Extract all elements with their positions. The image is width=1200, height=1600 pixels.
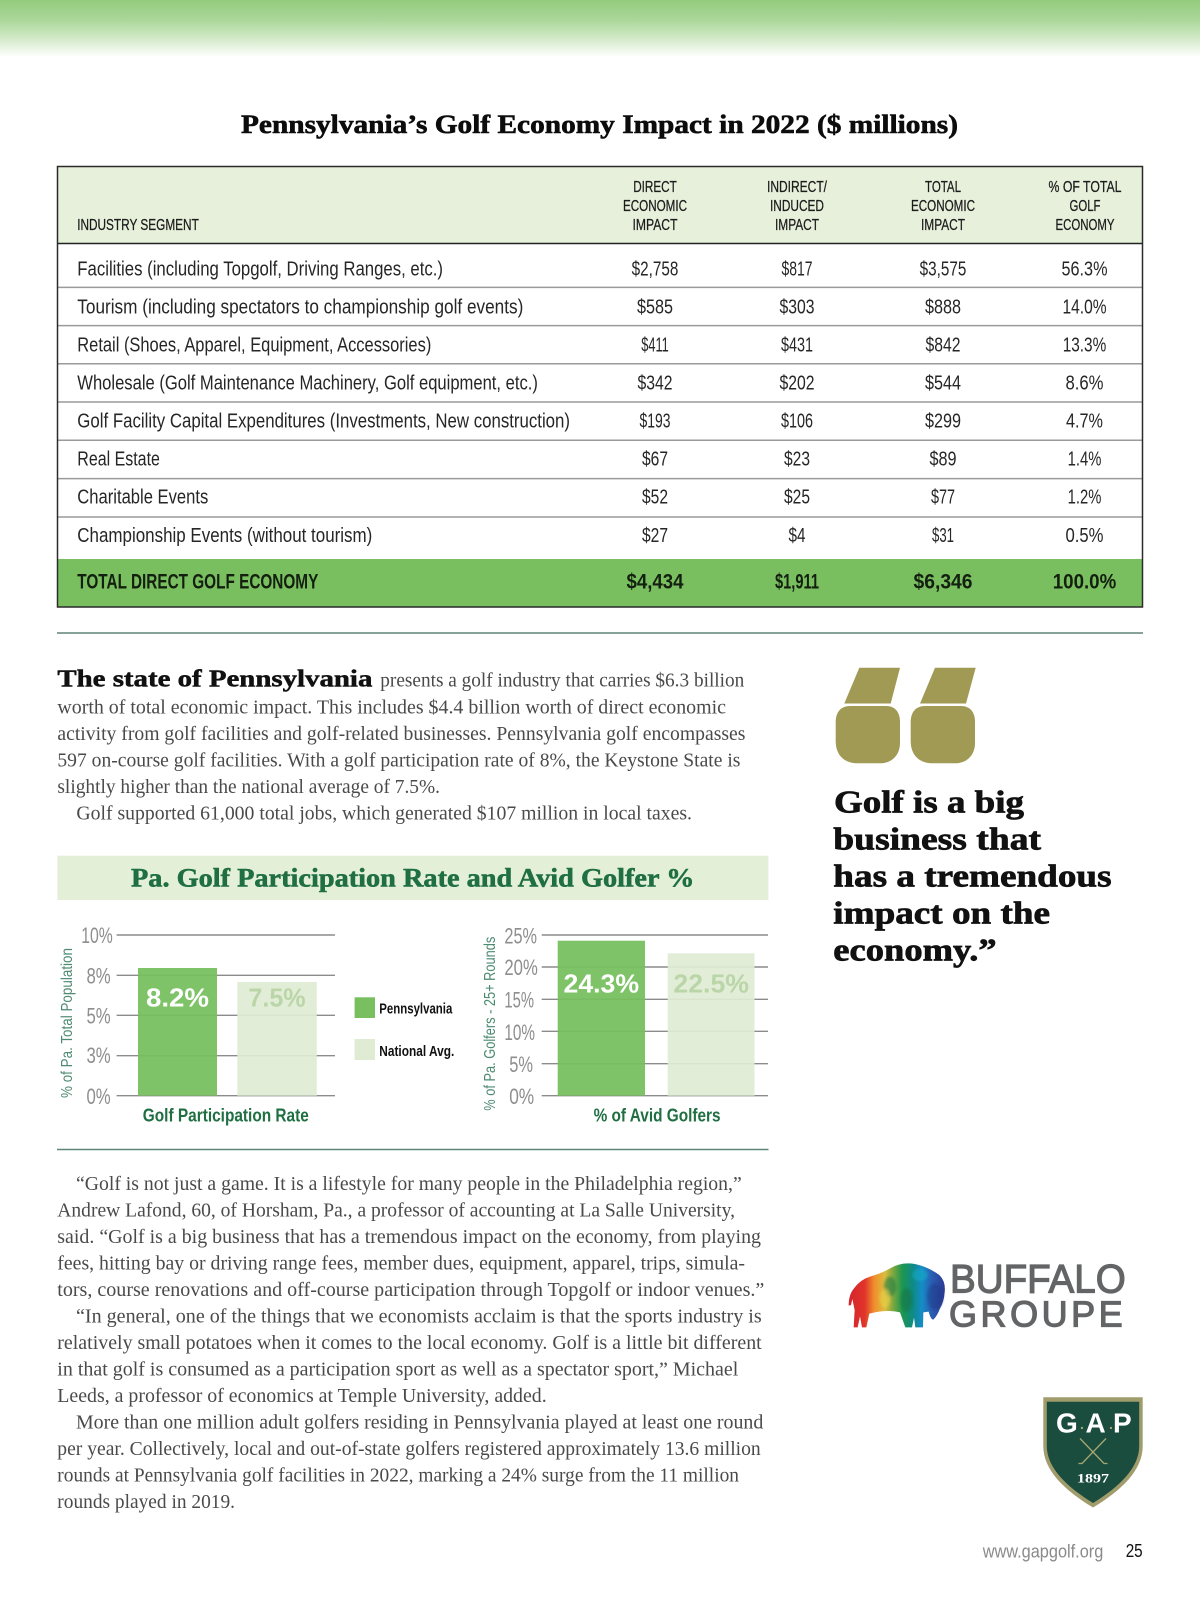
y axis ticks: 0% — [86, 1084, 111, 1109]
table header row — [58, 166, 1142, 244]
body text block: Andrew Lafond, 60, of Horsham, Pa., a professor of accounting at La Salle University, — [57, 1200, 735, 1222]
footer website: www.gapgolf.org — [982, 1541, 1103, 1561]
row: real estate — [77, 449, 1102, 471]
intro text block: 597 on-course golf facilities. With a golf participation rate of 8%, the Keystone State is — [57, 749, 741, 771]
row: championship events: Championship Events (without tourism) — [77, 525, 372, 547]
bar: Pennsylvania 24.3% — [558, 941, 645, 1096]
pull quote: has a tremendous — [833, 858, 1112, 894]
row: retail — [77, 334, 1106, 356]
x axis label: % of Avid Golfers — [594, 1106, 721, 1126]
logo: GAP shield: G — [1056, 1407, 1078, 1438]
logo: Buffalo Groupe — [849, 1258, 1126, 1335]
y axis ticks: 20% — [504, 955, 538, 980]
chart heading band — [57, 856, 768, 900]
bar: national average 7.5%: 7.5% — [248, 983, 306, 1013]
logo: Buffalo Groupe: BUFFALO — [950, 1258, 1126, 1302]
logo: GAP shield — [1043, 1397, 1143, 1508]
row: championship events — [77, 525, 1104, 547]
table header row: % OF TOTAL — [1048, 179, 1122, 196]
row: facilities — [77, 258, 1108, 280]
body text block: More than one million adult golfers residing in Pennsylvania played at least one round — [76, 1412, 763, 1434]
row: real estate: $67 — [642, 449, 668, 471]
row: capital expenditures — [77, 411, 1103, 433]
row: championship events: 0.5% — [1066, 525, 1104, 547]
intro text block: Golf supported 61,000 total jobs, which generated $107 million in local taxes. — [76, 802, 692, 824]
y axis ticks: 10% — [81, 923, 113, 948]
y axis ticks — [504, 923, 538, 1109]
y axis ticks: 15% — [504, 988, 534, 1013]
bar: Pennsylvania 8.2% — [138, 968, 217, 1096]
row: wholesale — [77, 372, 1104, 394]
icon: quotation marks — [836, 668, 976, 763]
panel: economic impact table — [57, 166, 1143, 607]
table header row: ECONOMY — [1056, 217, 1114, 234]
legend — [355, 997, 454, 1060]
row: capital expenditures: $193 — [640, 411, 670, 433]
row: retail: $431 — [781, 334, 813, 356]
body text block: “In general, one of the things that we economists acclaim is that the sports industry is — [76, 1306, 762, 1328]
row: wholesale: $544 — [925, 372, 961, 394]
bar: Pennsylvania 8.2%: 8.2% — [146, 983, 209, 1013]
y axis ticks: 0% — [509, 1084, 534, 1109]
top green gradient band — [0, 0, 1200, 57]
total row: $6,346 — [914, 570, 972, 594]
row: capital expenditures: $106 — [781, 411, 813, 433]
row: charitable events: $77 — [931, 487, 955, 509]
row: facilities: $3,575 — [920, 258, 966, 280]
body text block: tors, course renovations and off-course participation through Topgolf or indoor venues.” — [57, 1279, 764, 1301]
row: championship events: $27 — [642, 525, 668, 547]
table header row: INDIRECT/ — [767, 179, 828, 196]
table header row: GOLF — [1070, 198, 1100, 215]
pull quote: economy.” — [833, 932, 997, 968]
body text block: fees, hitting bay or driving range fees, member dues, equipment, apparel, trips, simula- — [57, 1252, 745, 1274]
table header row: DIRECT — [633, 179, 677, 196]
row: retail: $842 — [926, 334, 960, 356]
row: charitable events: 1.2% — [1068, 487, 1102, 509]
body text block: rounds played in 2019. — [57, 1491, 235, 1513]
body text block — [57, 1173, 764, 1513]
body text block: said. “Golf is a big business that has a tremendous impact on the economy, from playing — [57, 1226, 761, 1248]
icon: rainbow bison — [849, 1263, 945, 1327]
row: retail: Retail (Shoes, Apparel, Equipment, Accessories) — [77, 334, 431, 356]
table title: Pennsylvania’s Golf Economy Impact in 2022 ($ millions) — [241, 110, 958, 139]
intro text block: worth of total economic impact. This includes $4.4 billion worth of direct economic — [57, 696, 726, 718]
row: tourism: $585 — [637, 296, 673, 318]
pull quote: impact on the — [833, 894, 1050, 930]
logo: Buffalo Groupe: GROUPE — [949, 1294, 1123, 1335]
row: retail: 13.3% — [1063, 334, 1106, 356]
page number: 25 — [1126, 1541, 1143, 1561]
logo: GAP shield: 1897 — [1077, 1470, 1110, 1485]
y axis ticks: 10% — [504, 1020, 535, 1045]
row: tourism: $303 — [780, 296, 814, 318]
total row: 100.0% — [1053, 570, 1117, 594]
panel: participation charts — [57, 856, 768, 1126]
body text block: per year. Collectively, local and out-of-state golfers registered approximately 13.6 million — [57, 1438, 761, 1460]
row: real estate: $89 — [930, 449, 956, 471]
logo: GAP shield: · — [1080, 1419, 1085, 1435]
row: facilities: 56.3% — [1062, 258, 1108, 280]
pull quote — [833, 784, 1112, 968]
body text block: relatively small potatoes when it comes to the local economy. Golf is a little bit different — [57, 1332, 762, 1354]
row: real estate: $23 — [784, 449, 810, 471]
row: capital expenditures: $299 — [925, 411, 961, 433]
bar: Pennsylvania 24.3%: 24.3% — [564, 969, 639, 999]
row: facilities: $817 — [782, 258, 812, 280]
body text block: Leeds, a professor of economics at Temple University, added. — [57, 1385, 547, 1407]
row: wholesale: $342 — [638, 372, 672, 394]
row: charitable events: Charitable Events — [77, 487, 208, 509]
row: retail: $411 — [641, 334, 669, 356]
table header row: TOTAL — [925, 179, 961, 196]
body text block: “Golf is not just a game. It is a lifestyle for many people in the Philadelphia region,” — [76, 1173, 742, 1195]
row: tourism — [77, 296, 1107, 318]
row: real estate: Real Estate — [77, 449, 160, 471]
logo: GAP shield: · — [1109, 1419, 1114, 1435]
total row: $1,911 — [775, 570, 819, 594]
row: charitable events — [77, 487, 1102, 509]
row: championship events: $31 — [932, 525, 954, 547]
pull quote: Golf is a big — [834, 784, 1024, 820]
legend: National Avg. — [379, 1043, 454, 1060]
row: wholesale: 8.6% — [1066, 372, 1104, 394]
row: wholesale: Wholesale (Golf Maintenance Machinery, Golf equipment, etc.) — [77, 372, 538, 394]
logo: GAP shield: A — [1086, 1407, 1106, 1438]
table header row: IMPACT — [921, 217, 965, 234]
y axis ticks: 3% — [86, 1043, 111, 1068]
table header row: ECONOMIC — [911, 198, 975, 215]
body text block: in that golf is consumed as a participation sport as well as a spectator sport,” Michael — [57, 1358, 739, 1380]
row: capital expenditures: 4.7% — [1066, 411, 1103, 433]
intro text block: slightly higher than the national average of 7.5%. — [57, 776, 440, 798]
table header row: IMPACT — [632, 217, 678, 234]
legend: Pennsylvania — [379, 1000, 453, 1017]
total row: $4,434 — [626, 570, 684, 594]
body text block: rounds at Pennsylvania golf facilities in 2022, marking a 24% surge from the 11 million — [57, 1464, 739, 1486]
y axis title: % of Pa. Total Population — [59, 948, 76, 1098]
logo: GAP shield: P — [1113, 1407, 1132, 1438]
chart heading band: Pa. Golf Participation Rate and Avid Golfer % — [131, 864, 694, 893]
row: championship events: $4 — [788, 525, 806, 547]
bar: national average 7.5% — [237, 982, 317, 1096]
row: charitable events: $25 — [784, 487, 810, 509]
y axis title: % of Pa. Golfers - 25+ Rounds — [482, 937, 499, 1111]
row: tourism: Tourism (including spectators to championship golf events) — [77, 296, 523, 318]
bar chart: golf participation rate — [59, 923, 335, 1126]
icon: crossed golf clubs — [1078, 1438, 1108, 1464]
row: tourism: $888 — [925, 296, 961, 318]
row: wholesale: $202 — [780, 372, 814, 394]
y axis ticks — [81, 923, 113, 1109]
table header row: INDUCED — [770, 198, 824, 215]
row: charitable events: $52 — [642, 487, 668, 509]
y axis ticks: 5% — [86, 1003, 111, 1028]
total row: TOTAL DIRECT GOLF ECONOMY — [77, 570, 318, 594]
intro text block: activity from golf facilities and golf-related businesses. Pennsylvania golf encompasses — [57, 723, 746, 745]
y axis ticks: 5% — [509, 1052, 533, 1077]
y axis ticks: 8% — [86, 963, 111, 988]
intro text block: presents a golf industry that carries $6.3 billion — [380, 670, 744, 692]
row: facilities: Facilities (including Topgolf, Driving Ranges, etc.) — [77, 258, 443, 280]
x axis label: Golf Participation Rate — [143, 1106, 309, 1126]
table header row: INDUSTRY SEGMENT — [77, 217, 199, 234]
row: real estate: 1.4% — [1068, 449, 1102, 471]
bar: national average 22.5% — [668, 953, 754, 1096]
row: capital expenditures: Golf Facility Capital Expenditures (Investments, New construction) — [77, 411, 570, 433]
intro text block — [57, 666, 746, 824]
table header row: ECONOMIC — [623, 198, 687, 215]
row: tourism: 14.0% — [1062, 296, 1107, 318]
table header row: IMPACT — [775, 217, 819, 234]
total row — [58, 559, 1142, 607]
bar: national average 22.5%: 22.5% — [673, 969, 749, 999]
bar chart: percent of avid golfers — [482, 923, 768, 1126]
y axis ticks: 25% — [504, 923, 537, 948]
pull quote: business that — [833, 820, 1041, 856]
row: facilities: $2,758 — [632, 258, 678, 280]
intro text block: The state of Pennsylvania — [57, 666, 372, 692]
